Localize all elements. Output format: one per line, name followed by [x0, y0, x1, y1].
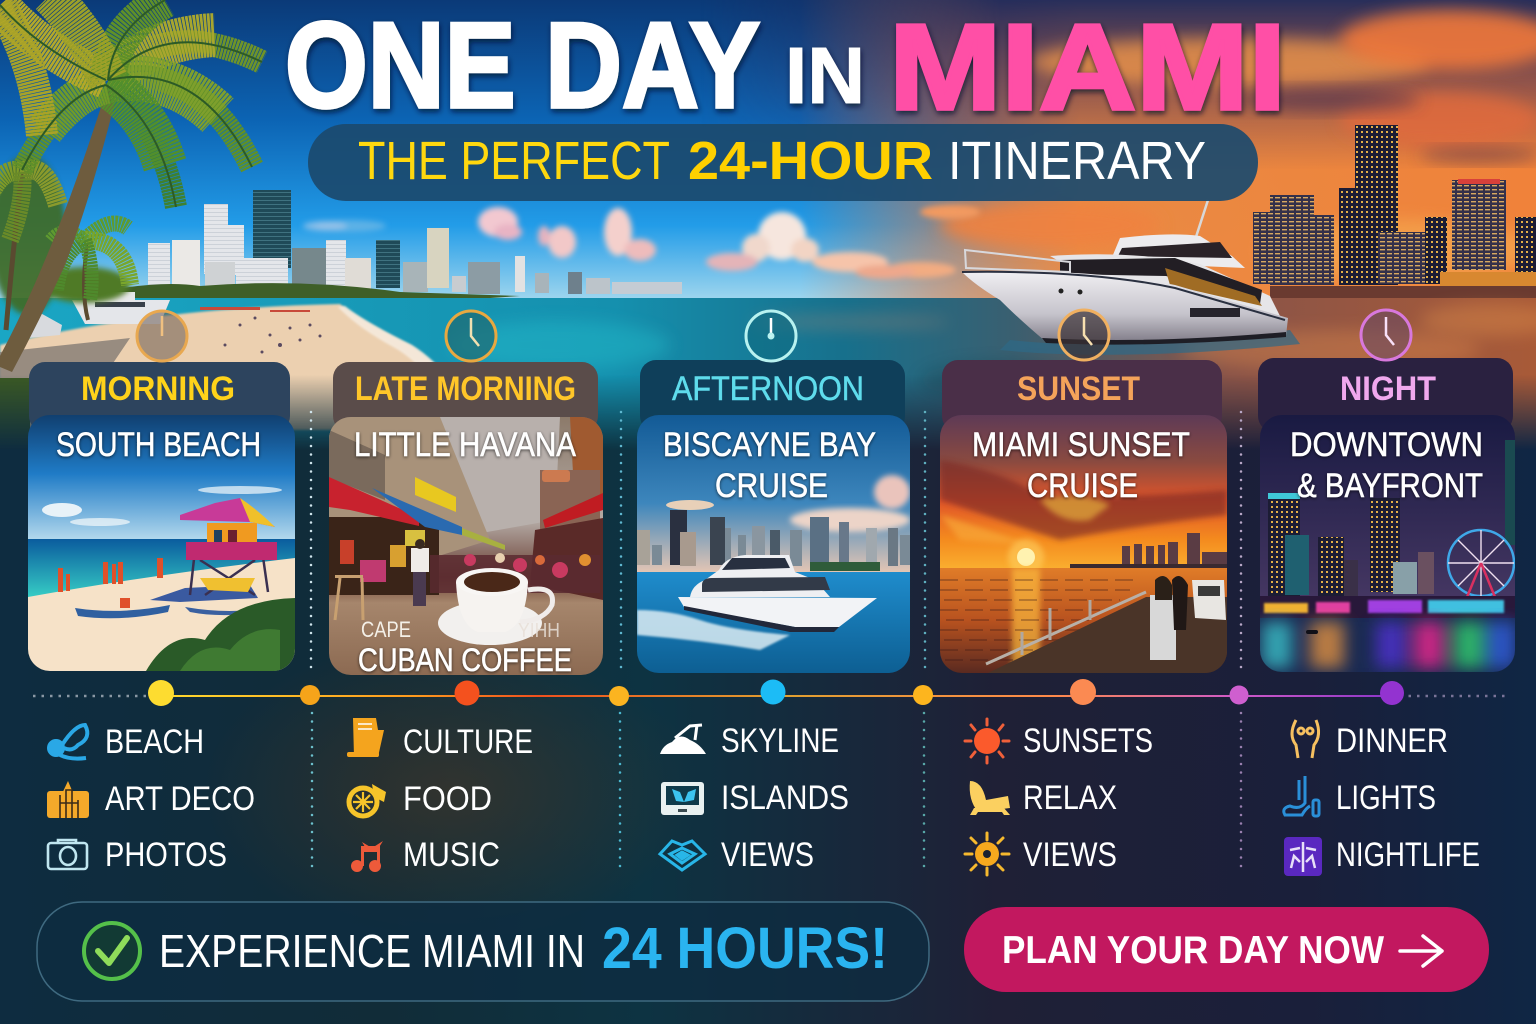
card header: late morning [333, 362, 598, 432]
list: late morning: CULTURE [403, 723, 533, 761]
palm trees [0, 0, 262, 372]
button: plan your day [964, 907, 1489, 992]
icon: art deco [47, 781, 89, 818]
skyline: Miami Beach towers [100, 190, 682, 304]
clock: late morning [446, 311, 496, 361]
panel: sunset [940, 360, 1227, 673]
icon: camera [48, 840, 87, 869]
photo: Little Havana [329, 417, 603, 675]
list: sunset: SUNSETS [1023, 722, 1153, 760]
list: night: DINNER [1336, 722, 1448, 760]
subtitle pill: ITINERARY [948, 131, 1206, 191]
icon: islands [661, 782, 704, 815]
icon: culture [347, 718, 384, 757]
clouds [303, 205, 980, 279]
dotted dividers between cards [311, 412, 1241, 868]
card titles: LITTLE HAVANA [354, 426, 576, 464]
clock: afternoon [746, 311, 796, 361]
card header: sunset [942, 360, 1222, 432]
list: afternoon: SKYLINE [721, 722, 839, 760]
callout: experience Miami: EXPERIENCE MIAMI IN [159, 925, 585, 977]
yacht [962, 200, 1300, 355]
photo: Downtown [1260, 415, 1515, 673]
list: afternoon [660, 722, 849, 874]
panel: late morning: CUBAN COFFEE [358, 642, 572, 678]
icon: nightlife [1284, 837, 1322, 876]
list: night: NIGHTLIFE [1336, 836, 1480, 874]
timeline [33, 679, 1510, 706]
list: sunset: VIEWS [1023, 836, 1117, 874]
clock: sunset [1059, 310, 1109, 360]
arrow [1400, 936, 1442, 966]
subtitle pill: THE PERFECT [358, 131, 670, 191]
panel: afternoon [637, 360, 910, 673]
photo: sunset cruise [940, 415, 1227, 673]
icon: music [351, 841, 383, 872]
list: morning: PHOTOS [105, 836, 227, 874]
list: night: LIGHTS [1336, 779, 1436, 817]
card titles: & BAYFRONT [1297, 467, 1483, 505]
list: night [1284, 720, 1480, 876]
beach and shoreline [0, 292, 482, 458]
title: MIAMI [889, 0, 1286, 135]
card header: night [1258, 358, 1513, 432]
panel: morning [28, 362, 295, 671]
icon: check [84, 923, 140, 979]
callout: experience Miami [37, 902, 929, 1001]
main palm trunk [0, 85, 118, 372]
skyline: Downtown at sunset [1253, 125, 1536, 300]
list: sunset: RELAX [1023, 779, 1117, 817]
photo: South Beach [28, 415, 295, 671]
list: late morning: MUSIC [403, 836, 500, 874]
card titles [1290, 426, 1483, 505]
icon: views [660, 841, 705, 870]
list: morning: ART DECO [105, 780, 255, 818]
icon: skyline [660, 725, 706, 754]
list: late morning: FOOD [403, 780, 492, 818]
list: late morning [347, 718, 533, 874]
icon: sun views [965, 833, 1009, 875]
background palms [0, 155, 130, 330]
subtitle pill [308, 124, 1258, 201]
main palm fronds [0, 0, 262, 207]
card titles: MIAMI SUNSET [972, 426, 1190, 464]
card header: sunset: SUNSET [1017, 370, 1140, 408]
title [285, 0, 1286, 135]
photo: Little Havana: YIHH [518, 620, 560, 642]
button: plan your day: PLAN YOUR DAY NOW [1002, 929, 1384, 972]
title: IN [785, 31, 865, 120]
icon: dinner [1292, 720, 1319, 758]
card titles [972, 426, 1190, 505]
background: lower dark panel [0, 340, 1536, 1024]
card header: morning [29, 362, 290, 432]
icon: lounge chair [970, 781, 1010, 815]
icon: beach [49, 725, 87, 759]
panel: night [1258, 358, 1515, 673]
list: morning: BEACH [105, 723, 204, 761]
card titles: DOWNTOWN [1290, 426, 1483, 464]
list: sunset [965, 719, 1153, 875]
title: ONE DAY [285, 0, 760, 133]
card titles: CRUISE [1027, 467, 1138, 505]
list: afternoon: ISLANDS [721, 779, 849, 817]
card titles: CRUISE [715, 467, 828, 505]
sea [0, 298, 1536, 458]
photo: Little Havana: CAPE [361, 617, 411, 642]
list: afternoon: VIEWS [721, 836, 814, 874]
callout: experience Miami: 24 HOURS! [602, 916, 888, 981]
card titles: BISCAYNE BAY [663, 426, 876, 464]
panel: late morning [329, 362, 603, 678]
background: sky and sunset scene [0, 0, 1536, 300]
card header: late morning: LATE MORNING [355, 370, 576, 408]
list: morning [47, 723, 255, 874]
icon: food [349, 784, 386, 816]
card header: morning: MORNING [81, 370, 235, 408]
card header: afternoon: AFTERNOON [672, 370, 864, 408]
card header: night: NIGHT [1340, 370, 1436, 408]
card title: SOUTH BEACH [56, 426, 261, 464]
clock: night [1361, 310, 1411, 360]
card titles [663, 426, 876, 505]
clock: morning [137, 311, 187, 361]
icon: lights [1284, 776, 1319, 816]
photo: Biscayne Bay [637, 415, 910, 673]
card header: afternoon [640, 360, 905, 432]
subtitle pill: 24-HOUR [688, 131, 933, 191]
icon: sun [965, 719, 1009, 763]
